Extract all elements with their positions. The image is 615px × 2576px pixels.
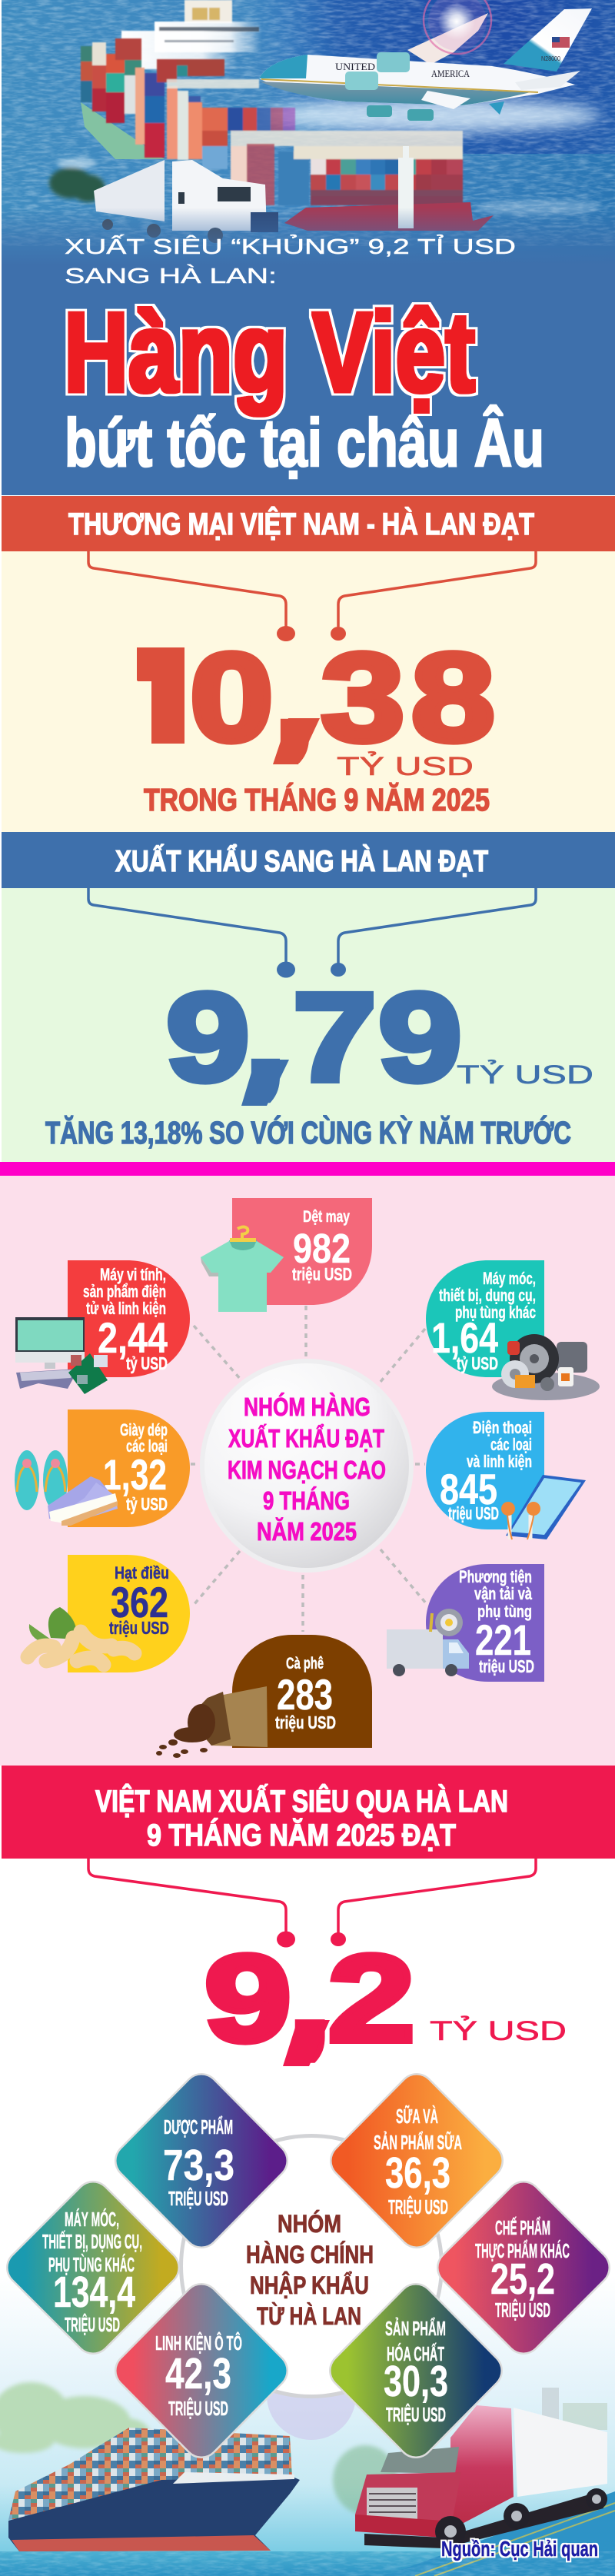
heading band: 9 THÁNG NĂM 2025 ĐẠT	[147, 1818, 456, 1852]
diamond: auto parts: TRIỆU USD	[168, 2397, 228, 2420]
unit: TỶ USD	[337, 752, 474, 781]
icon: coffee sack	[156, 1686, 268, 1758]
card: textiles	[201, 1198, 372, 1312]
central circle: KIM NGẠCH CAO	[228, 1456, 386, 1484]
diamond: machinery: PHỤ TÙNG KHÁC	[48, 2253, 135, 2276]
card: computers: sản phẩm điện	[83, 1282, 166, 1301]
icon: cashew nuts	[28, 1607, 135, 1665]
card: machinery	[426, 1260, 600, 1400]
subtitle	[65, 234, 516, 288]
card: coffee: Cà phê	[286, 1655, 324, 1672]
central circle	[200, 1359, 414, 1573]
central hub: NHÓM	[278, 2210, 341, 2238]
card: transport: phụ tùng	[477, 1602, 532, 1621]
connector lines	[88, 551, 536, 641]
panel: header	[2, 0, 615, 495]
diamond: auto parts	[133, 2301, 270, 2440]
heading band	[2, 832, 615, 888]
card: computers: tử và linh kiện	[86, 1299, 166, 1318]
cargo ship	[8, 2428, 300, 2551]
card: computers: tỷ USD	[126, 1353, 168, 1373]
card: footwear	[15, 1409, 190, 1527]
unit: TỶ USD	[430, 2015, 567, 2046]
card: coffee	[156, 1635, 372, 1758]
central circle: NHÓM HÀNG	[244, 1393, 371, 1421]
card: transport: triệu USD	[479, 1656, 534, 1676]
card: transport	[387, 1564, 544, 1682]
diamond: dairy	[348, 2092, 485, 2230]
card: machinery: 1,64	[431, 1313, 498, 1362]
sun flare	[424, 0, 491, 54]
connector lines	[88, 888, 536, 978]
caption: TRONG THÁNG 9 NĂM 2025	[144, 782, 490, 817]
plane: AMERICA	[431, 68, 470, 79]
diamond: auto parts: LINH KIỆN Ô TÔ	[155, 2331, 242, 2355]
diamond: dairy: 36,3	[385, 2148, 450, 2198]
card: machinery: phụ tùng khác	[455, 1303, 536, 1322]
card: computers: Máy vi tính,	[100, 1265, 166, 1284]
card: phones	[426, 1412, 586, 1539]
plane lettering: UNITED	[335, 61, 375, 72]
icon: phone and earbuds	[501, 1475, 586, 1539]
diamond: chemicals: HÓA CHẤT	[387, 2342, 444, 2365]
diamond: chemicals: 30,3	[384, 2357, 448, 2406]
connector lines	[88, 1859, 536, 1947]
red truck	[355, 2405, 607, 2548]
central circle: XUẤT KHẨU ĐẠT	[228, 1424, 384, 1453]
subtitle: XUẤT SIÊU “KHỦNG” 9,2 TỈ USD	[65, 234, 516, 258]
icon: t-shirt	[201, 1227, 284, 1312]
diamond: dairy: TRIỆU USD	[388, 2195, 448, 2218]
card: textiles: Dệt may	[303, 1208, 350, 1226]
card: computers: 2,44	[98, 1313, 168, 1362]
heading band	[2, 1766, 615, 1859]
card: machinery: tỷ USD	[457, 1353, 498, 1373]
card: phones: các loại	[490, 1435, 532, 1454]
panel: imports and footer scene	[0, 2092, 615, 2576]
icon: truck and wheel	[387, 1609, 469, 1676]
number 10,38: 10,38	[106, 627, 495, 767]
card: coffee: triệu USD	[275, 1712, 336, 1732]
central hub: HÀNG CHÍNH	[246, 2241, 374, 2268]
card: footwear: tỷ USD	[126, 1494, 168, 1514]
ship hull	[81, 102, 165, 159]
number 9,79: 9,79	[166, 967, 462, 1107]
card: phones: và linh kiện	[467, 1452, 532, 1471]
card: cashews: 362	[111, 1578, 168, 1626]
heading band: XUẤT KHẨU SANG HÀ LAN ĐẠT	[115, 844, 488, 878]
container stacks	[81, 38, 463, 205]
diamond: dairy: SỮA VÀ	[396, 2105, 438, 2128]
icon: computer	[15, 1317, 108, 1394]
card: transport: 221	[475, 1616, 531, 1664]
card: transport: vận tải và	[474, 1584, 533, 1603]
card: textiles: 982	[293, 1226, 351, 1272]
diamond: pharmaceuticals: 73,3	[163, 2141, 234, 2190]
heading band: VIỆT NAM XUẤT SIÊU QUA HÀ LAN	[95, 1783, 508, 1819]
header photo: sea, ship, plane, truck	[2, 0, 615, 269]
diamond: pharmaceuticals: TRIỆU USD	[168, 2187, 228, 2210]
card: transport: Phương tiện	[459, 1567, 532, 1586]
central hub: NHẬP KHẨU	[250, 2271, 369, 2299]
card: machinery: thiết bị, dụng cụ,	[439, 1286, 536, 1305]
diamond: machinery	[25, 2199, 161, 2336]
diamond: food preparations: CHẾ PHẨM	[495, 2216, 550, 2239]
icon: sandals and sneakers	[15, 1450, 118, 1526]
panel: exports	[2, 832, 615, 1162]
central circle: 9 THÁNG	[263, 1486, 350, 1515]
plane: N28000	[541, 55, 560, 62]
card: cashews: triệu USD	[109, 1618, 169, 1638]
number 9,2: 9,2	[204, 1929, 415, 2067]
diamond: auto parts: 42,3	[165, 2349, 231, 2398]
card: phones: triệu USD	[448, 1503, 499, 1523]
card: coffee: 283	[277, 1670, 333, 1719]
subtitle: SANG HÀ LAN:	[65, 264, 277, 288]
card: cashews	[28, 1555, 190, 1672]
plane	[259, 8, 592, 121]
heading band	[2, 496, 615, 551]
diamond: food preparations: TRIỆU USD	[495, 2298, 550, 2321]
ship superstructure	[121, 0, 262, 69]
panel: trade total	[2, 496, 615, 832]
diamond: pharmaceuticals	[133, 2092, 270, 2230]
diamond: machinery: TRIỆU USD	[65, 2313, 120, 2336]
diamond: food preparations: 25,2	[490, 2255, 555, 2304]
panel: export groups	[0, 1162, 615, 1766]
card: footwear: các loại	[126, 1436, 168, 1456]
truck	[94, 160, 278, 243]
card: machinery: Máy móc,	[483, 1269, 536, 1288]
central hub: TỪ HÀ LAN	[257, 2302, 361, 2330]
central hub	[179, 2134, 444, 2398]
diamond: dairy: SẢN PHẨM SỮA	[374, 2131, 462, 2154]
card: footwear: 1,32	[103, 1450, 167, 1499]
card: computers	[15, 1260, 190, 1394]
diamond: chemicals	[347, 2301, 484, 2440]
diamond: pharmaceuticals: DƯỢC PHẨM	[164, 2115, 233, 2138]
diamond: machinery: THIẾT BỊ, DỤNG CỤ,	[42, 2230, 142, 2253]
diamond: machinery: 134,4	[53, 2268, 135, 2317]
card: phones: 845	[440, 1465, 497, 1513]
tree	[49, 158, 105, 202]
title: Hàng Việt: Hàng Việt	[64, 289, 475, 416]
central circle: NĂM 2025	[257, 1517, 357, 1546]
unit: TỶ USD	[457, 1060, 593, 1090]
card: textiles: triệu USD	[292, 1264, 352, 1284]
footer scene	[0, 2276, 615, 2576]
diamond: machinery: MÁY MÓC,	[65, 2208, 119, 2231]
diamond: chemicals: TRIỆU USD	[386, 2403, 446, 2426]
icon: auto parts	[492, 1334, 600, 1400]
panel: trade surplus	[2, 1766, 615, 2067]
diamond: chemicals: SẢN PHẨM	[385, 2317, 446, 2340]
card: footwear: Giày dép	[120, 1420, 168, 1439]
diamond: food preparations	[455, 2199, 592, 2336]
card: phones: Điện thoại	[473, 1418, 532, 1437]
card: cashews: Hạt điều	[115, 1563, 169, 1583]
